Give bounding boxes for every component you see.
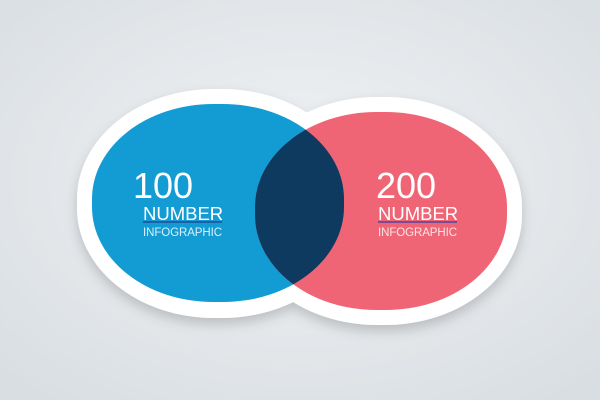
- text block: 200: 200: [376, 165, 436, 206]
- text block: 100: NUMBER: [143, 203, 223, 224]
- text block: 200: [376, 165, 458, 239]
- text block: 200: INFOGRAPHIC: [378, 227, 457, 239]
- blue circle: [92, 104, 344, 302]
- text block: 100: INFOGRAPHIC: [143, 227, 222, 239]
- text block: 100: 100: [133, 165, 193, 206]
- red circle: [255, 112, 507, 310]
- overlap lens: [255, 130, 344, 284]
- text block: 100: [133, 165, 223, 239]
- white outline: [77, 89, 522, 325]
- text block: 200: NUMBER: [378, 203, 458, 224]
